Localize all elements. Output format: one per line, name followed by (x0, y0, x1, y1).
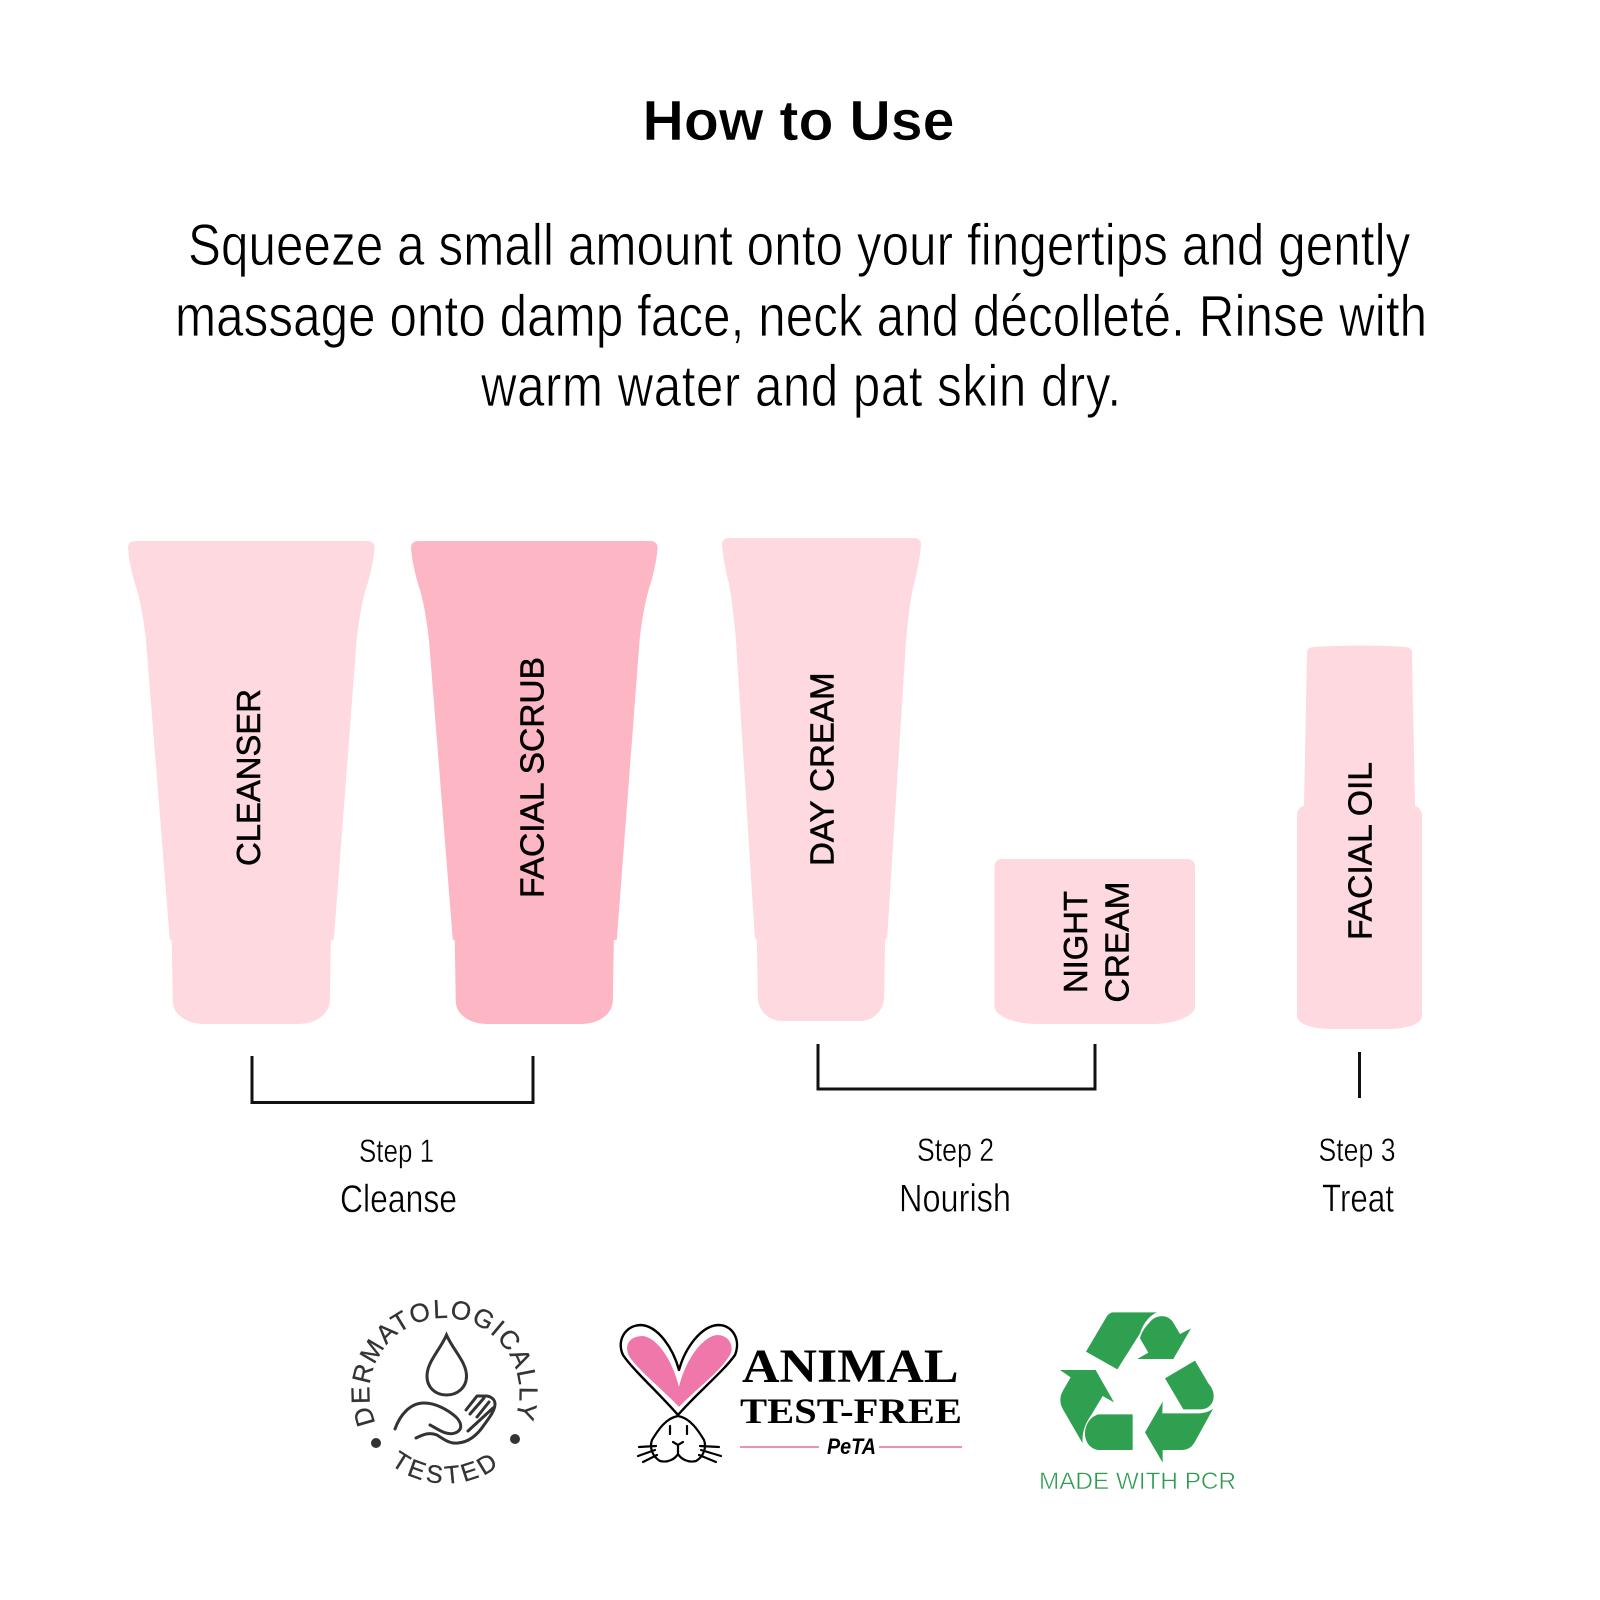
step 1 label (340, 1133, 457, 1221)
step 2 label: Nourish (899, 1178, 1011, 1220)
badge: recycle made with pcr: MADE WITH PCR (1039, 1468, 1236, 1495)
icon: water drop (427, 1335, 466, 1395)
icon: bunny face (638, 1416, 721, 1462)
icon: hand (395, 1396, 495, 1443)
badge: dermatologically tested: TESTED (395, 1450, 495, 1484)
icon: bunny ears (621, 1325, 737, 1415)
instructions text block: Squeeze a small amount onto your fingertips and gently (188, 213, 1410, 278)
product: night cream jar: NIGHT (1057, 891, 1094, 993)
icon: recycle symbol (1060, 1312, 1214, 1463)
instructions text block: massage onto damp face, neck and décolleté. Rinse with (175, 284, 1427, 349)
instructions text block (175, 213, 1427, 419)
bracket: step 2 (818, 1044, 1095, 1089)
instructions text block: warm water and pat skin dry. (480, 354, 1121, 419)
step 1 label: Step 1 (359, 1133, 434, 1169)
product: facial scrub tube (411, 541, 658, 1024)
step 3 label: Step 3 (1318, 1132, 1396, 1168)
badge: dermatologically tested (351, 1300, 538, 1484)
product: facial oil bottle (1297, 646, 1422, 1029)
badge: peta animal test-free (621, 1325, 962, 1462)
icon: pink ear fill (627, 1335, 732, 1407)
step 3 label: Treat (1322, 1178, 1394, 1220)
product: cleanser tube (128, 541, 375, 1024)
badge: peta animal test-free: PeTA (827, 1434, 876, 1459)
badge: recycle made with pcr (1039, 1312, 1236, 1495)
bracket: step 1 (252, 1056, 533, 1102)
step 2 label (899, 1132, 1011, 1220)
badge: peta animal test-free: ANIMAL (742, 1340, 958, 1393)
step 2 label: Step 2 (917, 1132, 994, 1168)
product: facial scrub tube: FACIAL SCRUB (514, 657, 550, 898)
step 1 label: Cleanse (340, 1178, 457, 1221)
badge: dermatologically tested: DERMATOLOGICALLY (351, 1300, 538, 1426)
step 3 label (1318, 1132, 1396, 1220)
line: step 3 (1358, 1052, 1361, 1098)
product: cleanser tube: CLEANSER (230, 689, 267, 866)
badge: peta animal test-free: TEST-FREE (740, 1391, 962, 1431)
product: night cream jar (994, 859, 1195, 1024)
product: night cream jar: CREAM (1098, 881, 1136, 1002)
product: day cream tube (722, 538, 921, 1021)
product: facial oil bottle: FACIAL OIL (1342, 762, 1378, 940)
product: day cream tube: DAY CREAM (804, 672, 840, 866)
title: How to Use (642, 89, 954, 153)
